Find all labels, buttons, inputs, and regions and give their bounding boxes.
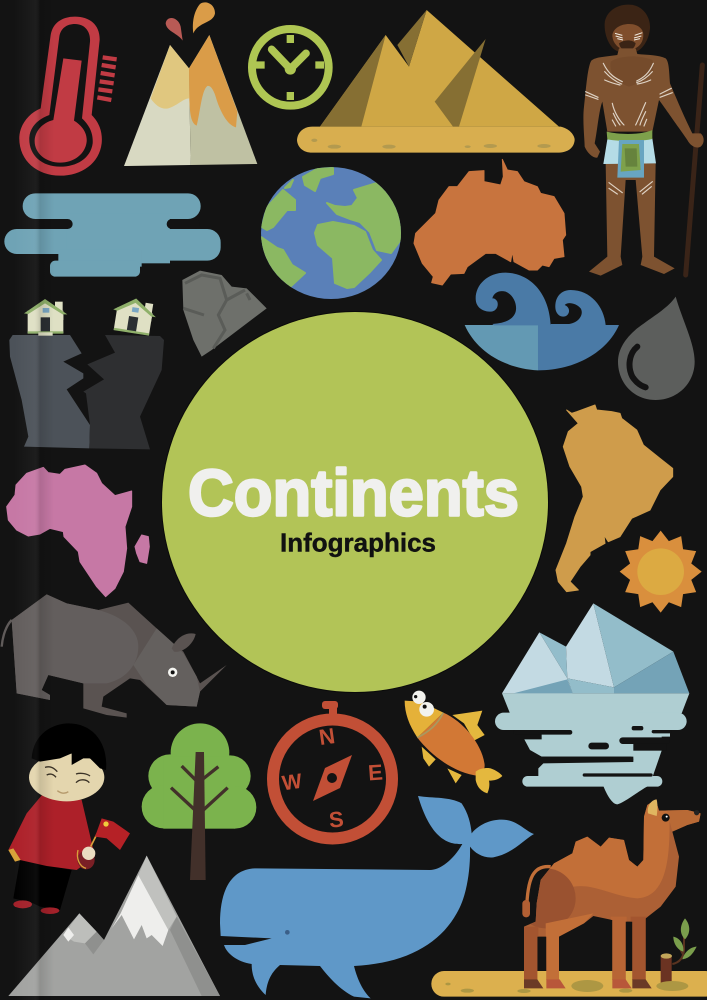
- icon: earth globe: [261, 167, 401, 299]
- land: south america: [261, 236, 306, 288]
- icon: oil drop: [618, 297, 695, 400]
- icon: aboriginal man with staff: [583, 5, 704, 276]
- icon: boy with chinese flag: [8, 723, 130, 914]
- sapling: [656, 918, 697, 991]
- compass letters: W: [281, 770, 304, 795]
- land: africa: [315, 222, 381, 288]
- icon: tree: [142, 723, 256, 880]
- subtitle: Infographics: Infographics: [280, 528, 436, 558]
- compass letters: E: [367, 760, 384, 786]
- land: europe and asia: [327, 183, 405, 253]
- icon: thermometer: [19, 17, 117, 176]
- icon: camel with sand and sapling: [431, 797, 707, 997]
- icon: south america map: [556, 405, 673, 592]
- icon: iceberg: [495, 603, 689, 804]
- icon: compass: [273, 701, 392, 838]
- icon: ocean wave: [465, 273, 619, 370]
- icon: fish: [405, 691, 502, 793]
- title circle: [161, 311, 549, 693]
- icon: water cloud: [4, 193, 221, 277]
- land: arctic: [285, 180, 293, 188]
- land: north america: [262, 190, 295, 230]
- camel body: [524, 800, 701, 980]
- icon: earthquake cliff: [9, 335, 164, 449]
- icon: clock: [252, 29, 329, 106]
- icon: pyramids: [297, 10, 575, 153]
- icon: snowy mountains: [8, 856, 220, 996]
- compass letters: N: [317, 723, 337, 750]
- land: greenland: [303, 168, 333, 191]
- camel tail: [527, 867, 551, 910]
- icon: right house: [110, 295, 158, 336]
- title: Continents: Continents: [188, 456, 519, 530]
- compass letters: S: [328, 806, 345, 833]
- icon: left house: [24, 299, 67, 336]
- icon: australia map: [414, 159, 566, 285]
- icon: blue whale: [220, 796, 534, 998]
- icon: volcano: [124, 2, 257, 166]
- compass letters: [281, 723, 384, 833]
- icon: sun: [620, 531, 702, 613]
- icon: rock: [182, 271, 267, 357]
- icon: rhino: [2, 594, 227, 718]
- sand strip: [431, 971, 707, 997]
- icon: africa map: [7, 465, 149, 597]
